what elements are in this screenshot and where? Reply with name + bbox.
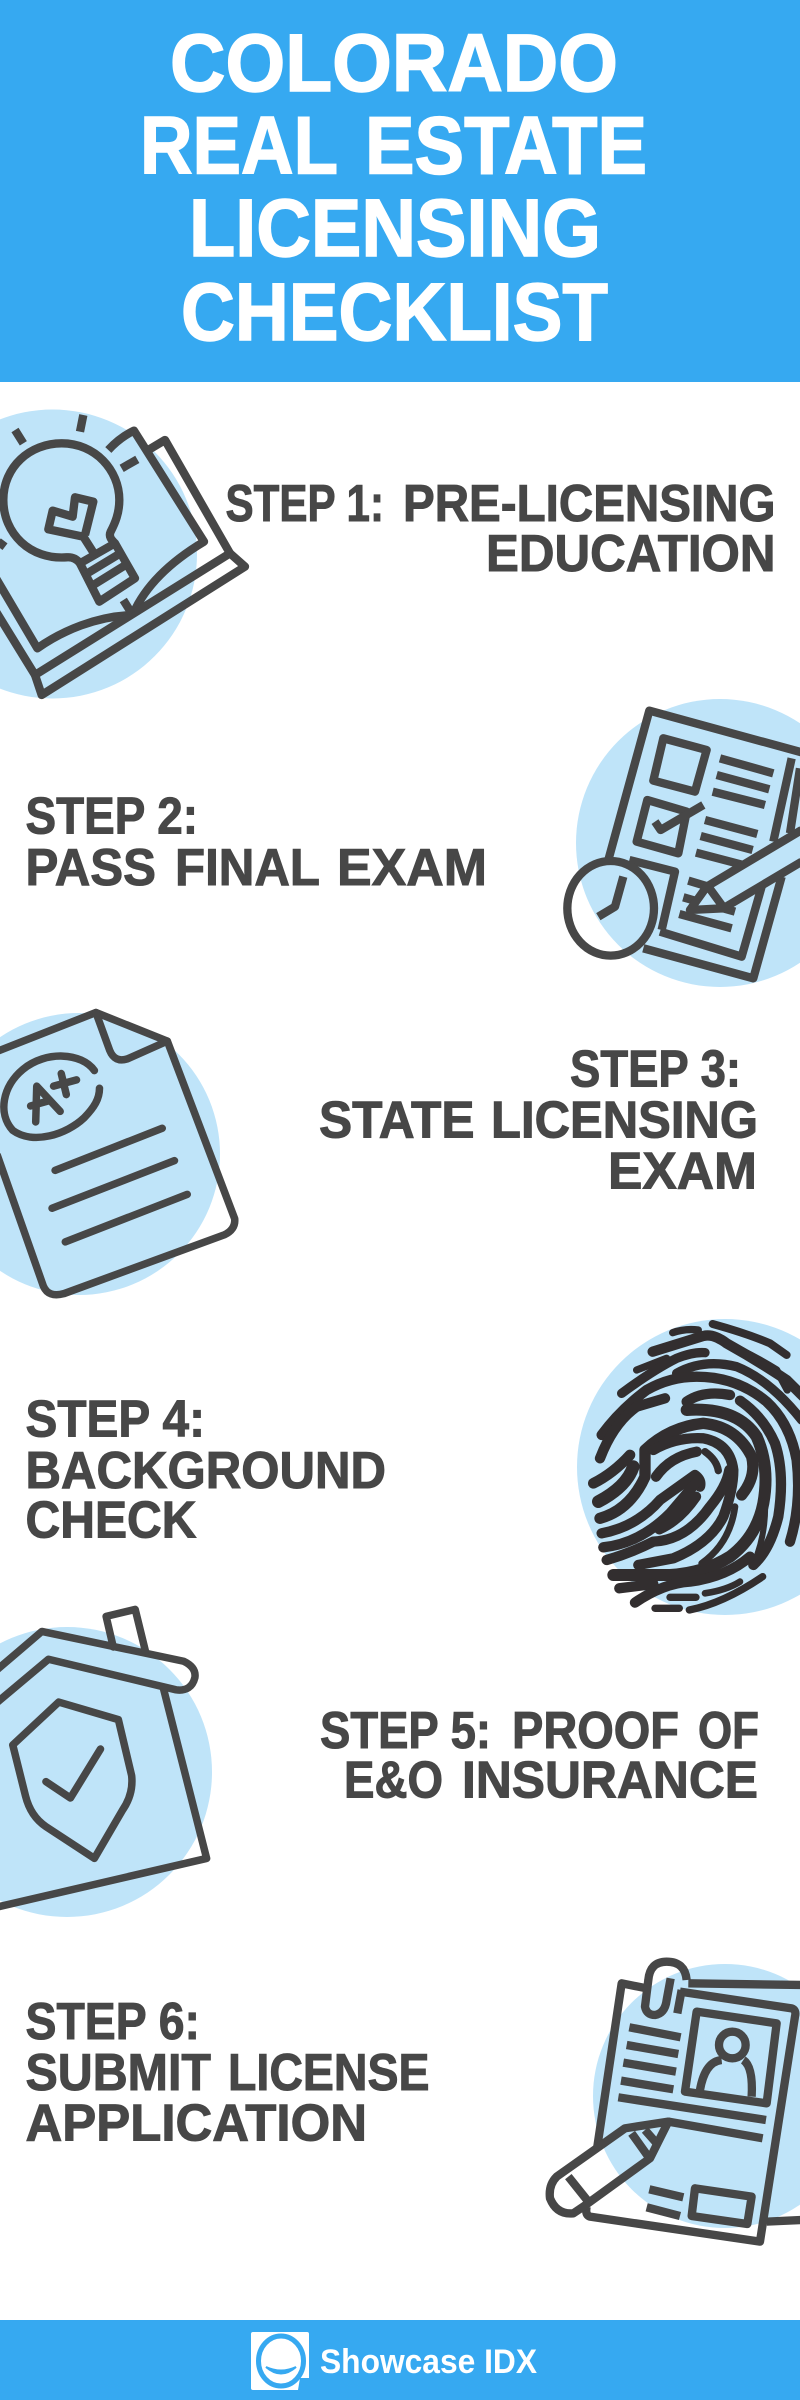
- step 1 text: EDUCATION: [486, 525, 776, 583]
- icon: application form with paperclip and pen: [550, 1962, 800, 2242]
- step 6 text: APPLICATION: [26, 2095, 367, 2153]
- step 6 text: LICENSE: [228, 2044, 430, 2102]
- step 2 text: EXAM: [337, 839, 487, 897]
- step 1 text: STEP 1:: [226, 475, 384, 533]
- title: CHECKLIST: [181, 267, 608, 358]
- icon: book and light bulb: [0, 410, 245, 698]
- step 2 text: PASS: [26, 839, 156, 897]
- icon: exam paper with pen and magnifier: [567, 699, 800, 987]
- step 3 text: STEP 3:: [570, 1041, 741, 1099]
- step 1 text: PRE-LICENSING: [403, 475, 776, 533]
- step 2 text: STEP 2:: [26, 788, 198, 846]
- step 6 text: [26, 1993, 430, 2153]
- title: REAL: [140, 100, 338, 192]
- step 3 text: EXAM: [608, 1142, 757, 1200]
- step 3 text: [319, 1041, 758, 1200]
- step 2 text: FINAL: [175, 839, 320, 897]
- step 6 text: SUBMIT: [26, 2044, 211, 2102]
- icon: house with shield: [0, 1609, 212, 1917]
- step 3 text: STATE: [319, 1092, 474, 1150]
- title: LICENSING: [189, 183, 601, 274]
- step 5 text: STEP 5:: [320, 1702, 491, 1760]
- icon: Showcase IDX logo: [251, 2332, 309, 2390]
- step 5 text: [320, 1702, 759, 1810]
- brand name: Showcase IDX: [320, 2343, 537, 2381]
- step 4 text: CHECK: [26, 1492, 197, 1550]
- step 1 text: [226, 475, 776, 583]
- step 5 text: PROOF: [512, 1702, 679, 1760]
- title: ESTATE: [365, 100, 647, 192]
- title: COLORADO: [170, 18, 618, 109]
- step 3 text: LICENSING: [491, 1092, 758, 1150]
- step 4 text: [26, 1391, 386, 1550]
- header band: [0, 0, 800, 382]
- icon: fingerprint: [577, 1319, 800, 1615]
- step 2 text: [26, 788, 487, 897]
- step 4 text: STEP 4:: [26, 1391, 205, 1449]
- title: [140, 18, 647, 358]
- icon: graded paper A+: [0, 1013, 235, 1295]
- step 5 text: INSURANCE: [462, 1752, 758, 1810]
- step 5 text: E&O: [344, 1752, 443, 1810]
- step 6 text: STEP 6:: [26, 1993, 200, 2051]
- step 5 text: OF: [698, 1702, 759, 1760]
- step 4 text: BACKGROUND: [26, 1442, 386, 1500]
- footer band: [0, 2320, 800, 2400]
